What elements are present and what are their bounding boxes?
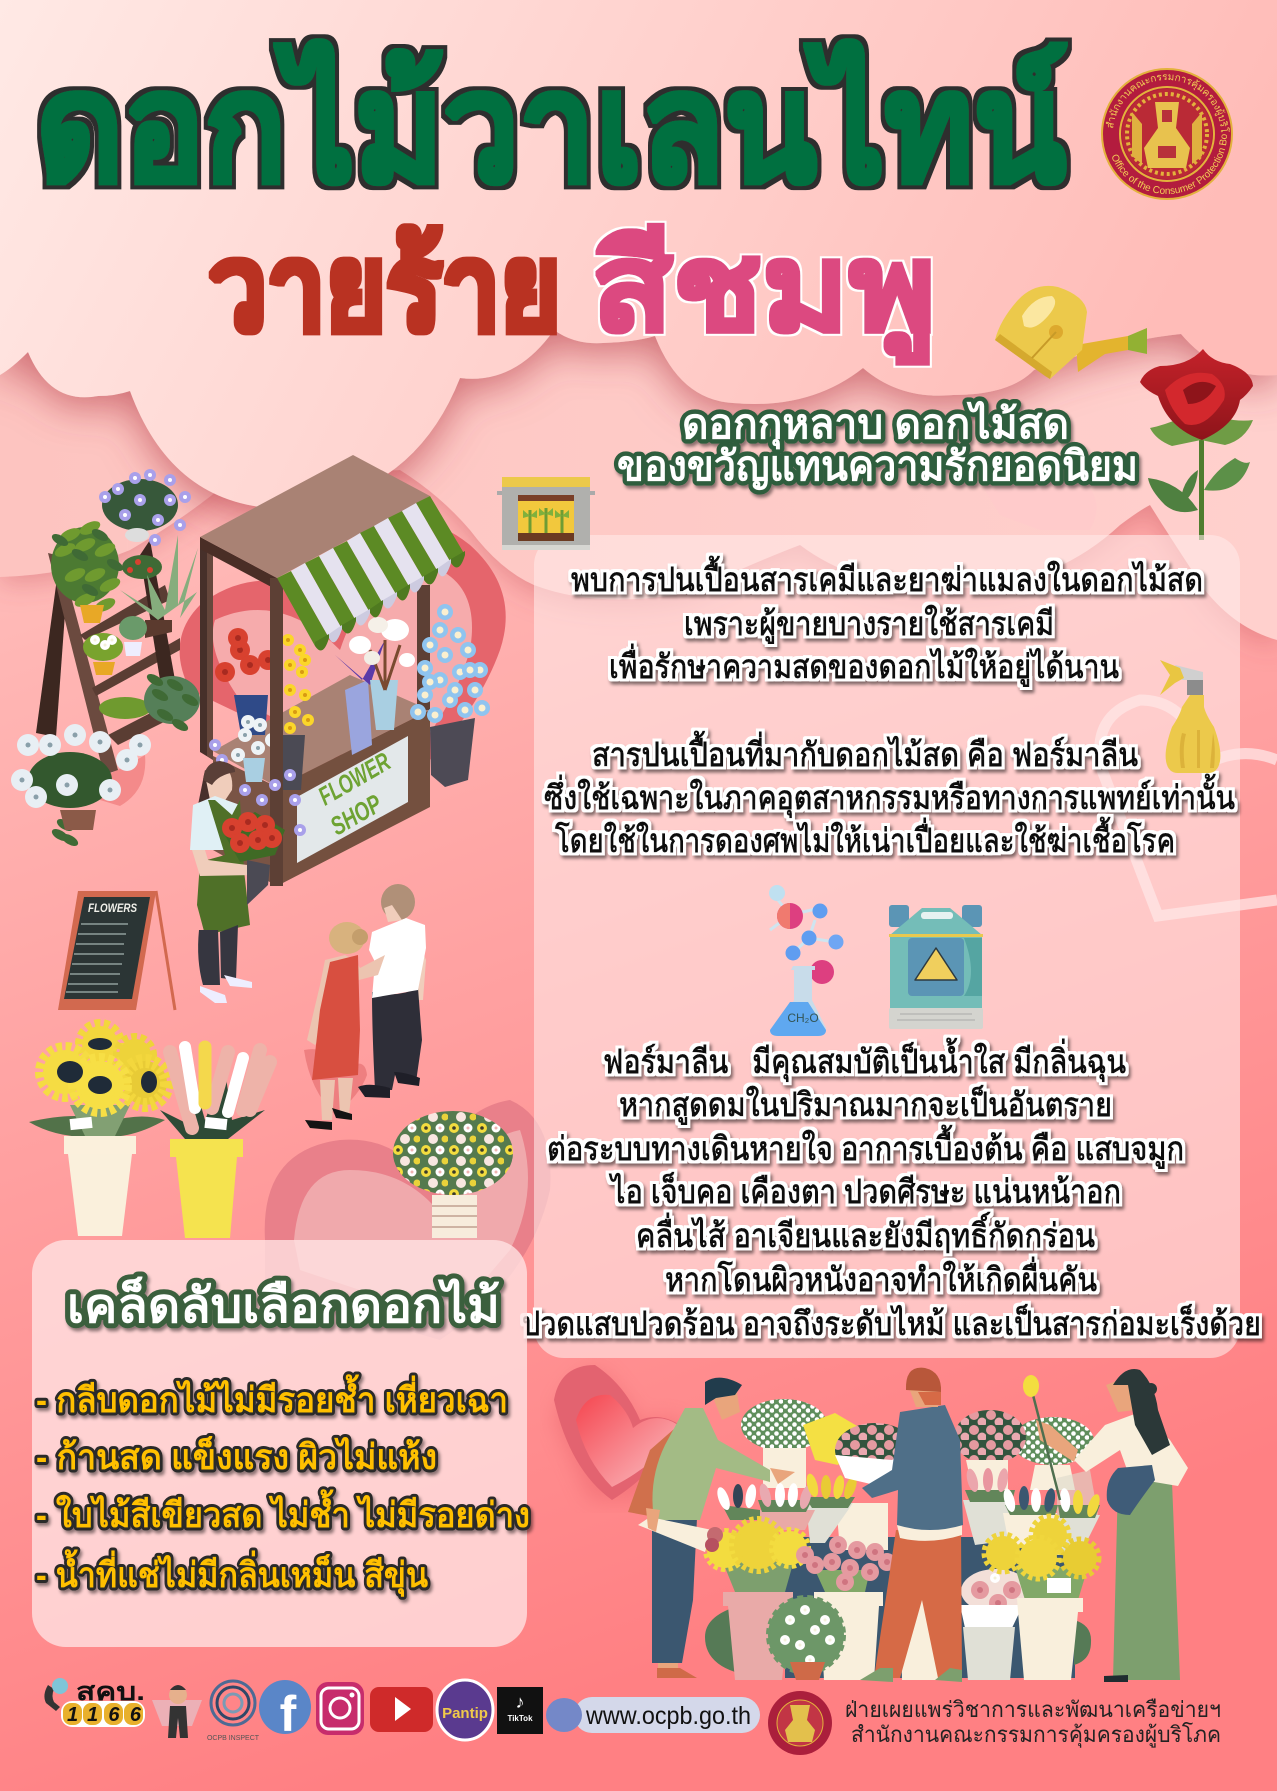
text block: intro [571, 556, 1203, 687]
illustration: flower market [628, 1368, 1188, 1682]
heart: behind couple [304, 1049, 367, 1115]
icon: red rose [1140, 349, 1253, 540]
heading: fresh rose: ดอกกุหลาบ ดอกไม้สด [682, 400, 1069, 450]
emblem: OCPB seal [1101, 68, 1233, 200]
text block: intro: เพราะผู้ขายบางรายใช้สารเคมี [684, 605, 1054, 644]
illustration: menu board [58, 891, 175, 1010]
icon: flask with molecules [769, 885, 844, 1036]
list: tips: - ก้านสด แข็งแรง ผิวไม่แห้ง [36, 1435, 437, 1477]
footer: website pill [546, 1697, 760, 1733]
text block: formalin hazards: ไอ เจ็บคอ เคืองตา ปวดศีรษะ แน่นหน้าอก [608, 1172, 1121, 1210]
heart: behind flower stall [180, 522, 506, 790]
footer: OCPB inspect logo: OCPB INSPECT [207, 1735, 260, 1742]
footer: agency text: สำนักงานคณะกรรมการคุ้มครองผู้บริโภค [851, 1722, 1221, 1748]
illustration: flower stall [200, 455, 465, 886]
figure: florist [190, 739, 306, 1003]
text block: formalin: โดยใช้ในการดองศพไม่ให้เน่าเปื่อยและใช้ฆ่าเชื้อโรค [555, 817, 1175, 859]
list: tips: - กลีบดอกไม้ไม่มีรอยช้ำ เหี่ยวเฉา [36, 1374, 508, 1420]
panel: chemical information [534, 535, 1240, 1358]
heading: popular gift: ของขวัญแทนความรักยอดนิยม [617, 443, 1138, 490]
footer: facebook icon [259, 1680, 311, 1742]
figure: man with bag [628, 1378, 795, 1678]
subtitle line: villain: วายร้าย [209, 220, 561, 356]
illustration: blue flowers bucket [410, 604, 490, 787]
footer: agency text: ฝ่ายเผยแพร่วิชาการและพัฒนาเครือข่ายฯ [845, 1697, 1221, 1722]
heart: lower right [554, 1365, 690, 1500]
text block: formalin: สารปนเปื้อนที่มากับดอกไม้สด คือ ฟอร์มาลีน [592, 731, 1138, 773]
footer: pantip icon [437, 1680, 493, 1740]
text block: formalin [544, 731, 1235, 859]
footer: tiktok icon [497, 1687, 543, 1734]
list: tips [36, 1374, 530, 1597]
footer: hotline 1166: สคบ. [76, 1678, 145, 1706]
subtitle line: pink: สีชมพู [592, 220, 936, 364]
panel: flower tips [32, 1240, 530, 1647]
heading: tips: เคล็ดลับเลือกดอกไม้ [67, 1276, 500, 1333]
text block: formalin hazards: หากโดนผิวหนังอาจทำให้เกิดผื่นคัน [665, 1257, 1097, 1298]
illustration: menu board: FLOWERS [88, 901, 137, 915]
icon: chemical jug [889, 905, 983, 1029]
footer: website pill: www.ocpb.go.th [585, 1702, 751, 1730]
footer: agency text [845, 1697, 1221, 1748]
heart: faded centre [970, 454, 1097, 530]
text block: formalin hazards: คลื่นไส้ อาเจียนและยังมีฤทธิ์กัดกร่อน [636, 1212, 1095, 1254]
footer: OCPB inspect logo [207, 1681, 260, 1742]
footer: tiktok icon: ♪ [516, 1692, 524, 1712]
back cloud layer [0, 0, 1277, 640]
illustration: flower stall: SHOP [325, 788, 387, 841]
text block: formalin hazards: ต่อระบบทางเดินหายใจ อาการเบื้องต้น คือ แสบจมูก [547, 1125, 1184, 1169]
decorative heart outline [1100, 700, 1277, 916]
title: ดอกไม้วาเลนไทน์ [36, 40, 1067, 214]
illustration: sunflower pot [29, 1026, 167, 1236]
illustration: plant ladder [11, 469, 200, 848]
illustration: flower stall: FLOWER [313, 746, 396, 811]
icon: flask with molecules: CH₂O [787, 1011, 819, 1025]
icon: watering can [995, 286, 1147, 379]
footer: youtube icon [370, 1687, 433, 1732]
text block: formalin hazards: หากสูดดมในปริมาณมากจะเป็นอันตราย [619, 1085, 1112, 1125]
heart: stall inner [213, 569, 472, 780]
list: tips: - น้ำที่แช่ไม่มีกลิ่นเหม็น สีขุ่น [36, 1549, 428, 1597]
front cloud layer [0, 0, 1277, 508]
footer: instagram icon [316, 1682, 364, 1735]
footer: facebook icon: f [280, 1686, 297, 1742]
list: tips: - ใบไม้สีเขียวสด ไม่ช้ำ ไม่มีรอยด่าง [36, 1489, 530, 1535]
illustration: mixed flower box [393, 1111, 513, 1238]
heart: near flower plant [95, 755, 145, 806]
footer: tiktok icon: TikTok [507, 1714, 533, 1723]
figure: man in blue jacket [860, 1368, 963, 1682]
footer: hotline 1166: 1166 [67, 1704, 142, 1726]
footer: OCPB seal [768, 1691, 832, 1755]
figure: couple [305, 884, 426, 1130]
footer: cartoon mascot [152, 1685, 202, 1738]
text block: formalin hazards: ฟอร์มาลีน มีคุณสมบัติเป็นน้ำใส มีกลิ่นฉุน [603, 1038, 1126, 1082]
illustration: yellow pot [160, 1047, 270, 1238]
icon: seedling box [497, 477, 595, 550]
text block: formalin hazards [522, 1038, 1261, 1342]
footer: pantip icon: Pantip [442, 1705, 488, 1722]
heart: large lower [265, 1100, 550, 1340]
icon: spray bottle [1160, 660, 1220, 773]
text block: intro: เพื่อรักษาความสดของดอกไม้ให้อยู่ได้นาน [609, 644, 1119, 687]
footer: hotline 1166 [44, 1678, 145, 1727]
figure: woman with rose [1023, 1369, 1188, 1682]
